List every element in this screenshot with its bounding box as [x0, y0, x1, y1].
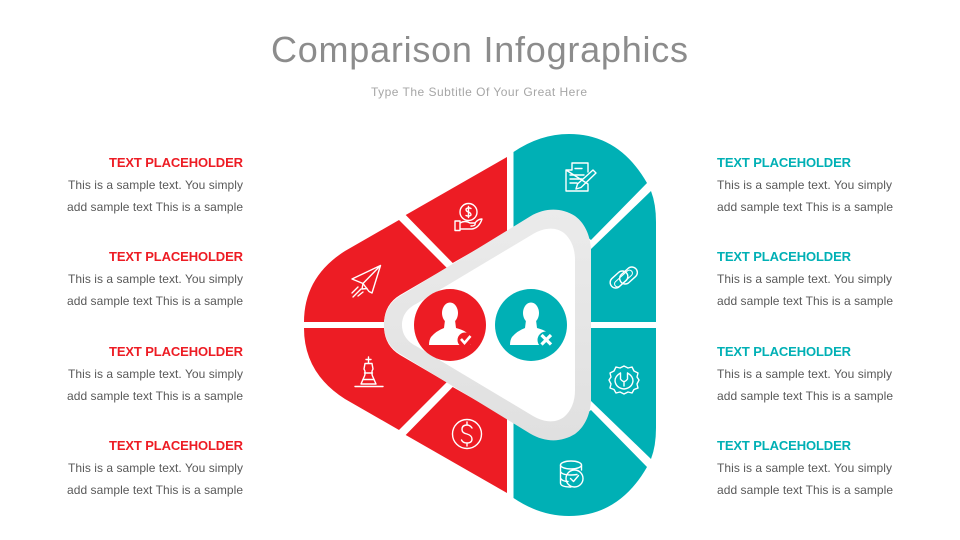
left text block 3: add sample text This is a sample	[67, 389, 243, 403]
right text block 3: TEXT PLACEHOLDER	[717, 344, 852, 359]
segment: bottom teal	[514, 410, 647, 516]
left text block 4: TEXT PLACEHOLDER	[109, 438, 244, 453]
segment: upper left red	[304, 220, 447, 322]
left text block 1: This is a sample text. You simply	[68, 178, 243, 192]
white inner triangle	[402, 229, 575, 421]
right text block 4: TEXT PLACEHOLDER	[717, 438, 852, 453]
left text block 4: This is a sample text. You simply	[68, 461, 243, 475]
right text block 4	[717, 438, 893, 497]
icon: gear with wrench	[609, 366, 639, 394]
segment: upper right teal	[591, 191, 656, 322]
right text block 1	[717, 155, 893, 214]
segment: bottom red	[406, 387, 507, 493]
right text column	[717, 155, 893, 497]
right text block 2	[717, 249, 893, 308]
icon: chess king	[355, 357, 383, 386]
segment: top red	[406, 157, 507, 263]
segment: lower left red	[304, 328, 447, 430]
left text block 1	[67, 155, 244, 214]
right text block 2: add sample text This is a sample	[717, 294, 893, 308]
left text block 3: This is a sample text. You simply	[68, 367, 243, 381]
right text block 3	[717, 344, 893, 403]
left text block 3: TEXT PLACEHOLDER	[109, 344, 244, 359]
left text block 2: TEXT PLACEHOLDER	[109, 249, 244, 264]
right text block 2: This is a sample text. You simply	[717, 272, 892, 286]
icon: document with pencil	[566, 163, 596, 191]
left text block 1: TEXT PLACEHOLDER	[109, 155, 244, 170]
right text block 3: This is a sample text. You simply	[717, 367, 892, 381]
icon: paper plane	[352, 266, 380, 297]
right text block 1: This is a sample text. You simply	[717, 178, 892, 192]
icon: coin in hand	[455, 204, 482, 230]
grey triangle ring	[384, 210, 591, 440]
title: Comparison Infographics	[271, 29, 688, 70]
left text block 1: add sample text This is a sample	[67, 200, 243, 214]
right text block 4: This is a sample text. You simply	[717, 461, 892, 475]
icon: chain link	[608, 265, 640, 290]
left text block 3	[67, 344, 244, 403]
left text block 2: add sample text This is a sample	[67, 294, 243, 308]
subtitle: Type The Subtitle Of Your Great Here	[371, 85, 587, 99]
segment: lower right teal	[591, 328, 656, 459]
icon: dollar circle	[452, 420, 482, 448]
left text column	[67, 155, 244, 497]
teal segments	[514, 134, 656, 516]
icon: database with check	[560, 461, 583, 487]
red segments	[304, 157, 507, 493]
left text block 4: add sample text This is a sample	[67, 483, 243, 497]
red person badge	[414, 289, 486, 361]
teal person badge	[495, 289, 567, 361]
right text block 1: TEXT PLACEHOLDER	[717, 155, 852, 170]
left text block 4	[67, 438, 244, 497]
left text block 2	[67, 249, 244, 308]
right text block 3: add sample text This is a sample	[717, 389, 893, 403]
right text block 4: add sample text This is a sample	[717, 483, 893, 497]
right text block 2: TEXT PLACEHOLDER	[717, 249, 852, 264]
segment: top teal	[514, 134, 647, 240]
left text block 2: This is a sample text. You simply	[68, 272, 243, 286]
right text block 1: add sample text This is a sample	[717, 200, 893, 214]
